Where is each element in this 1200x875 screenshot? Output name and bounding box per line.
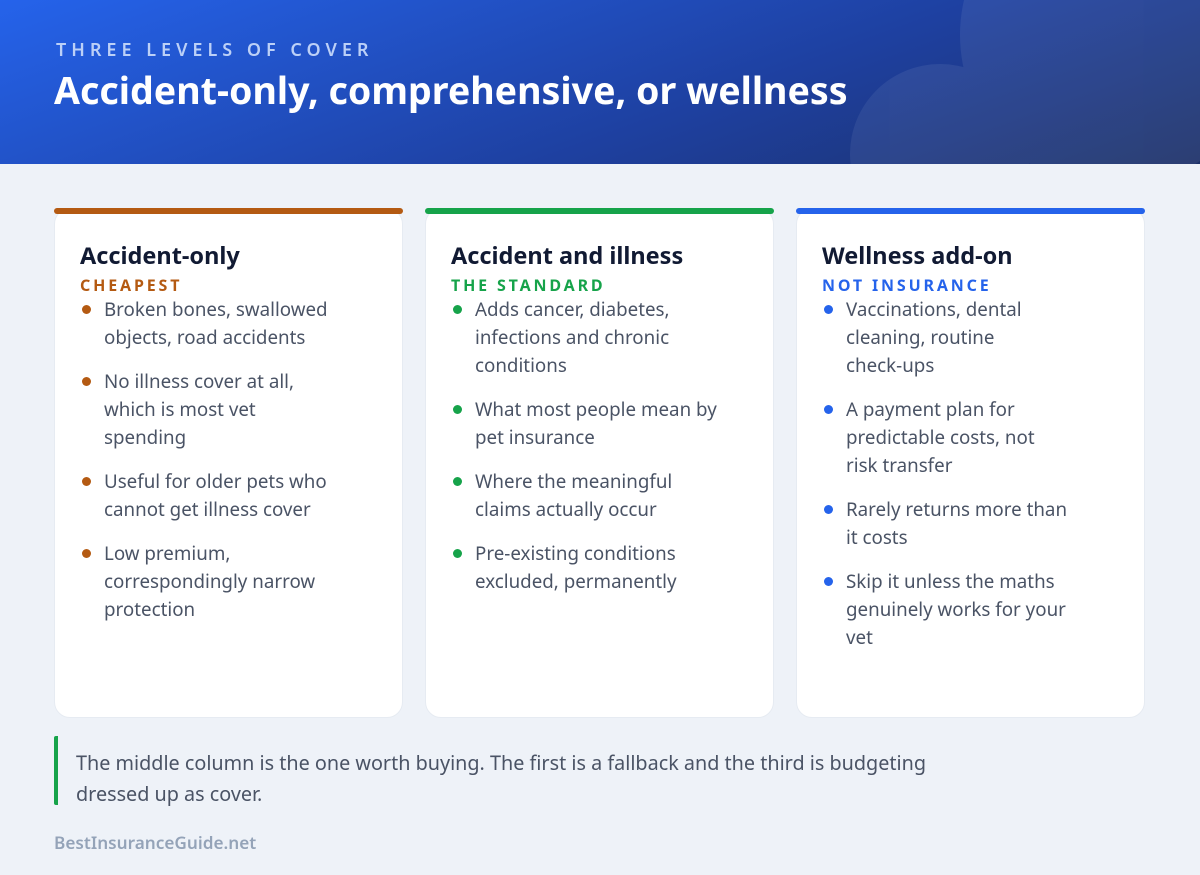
panel: accident-only: correspondingly narrow [104, 569, 315, 594]
panel: accident and illness: What most people mean by [475, 397, 717, 422]
panel: accident-only [54, 208, 403, 718]
panel: wellness add-on: Skip it unless the maths [846, 569, 1055, 594]
accent bar: accident-only [54, 208, 403, 214]
panel: wellness add-on: cleaning, routine [846, 325, 994, 350]
bullet [824, 497, 1067, 550]
panel: wellness add-on: Vaccinations, dental [846, 297, 1022, 322]
accent bar: accident and illness [425, 208, 774, 214]
header banner [0, 0, 1200, 164]
panel: wellness add-on [796, 208, 1145, 718]
bullet [82, 369, 294, 450]
bullet [453, 397, 717, 450]
panel: accident and illness: Pre-existing conditions [475, 541, 676, 566]
tag: THE STANDARD [451, 274, 605, 296]
panel: accident and illness: excluded, permanently [475, 569, 677, 594]
panel: accident and illness: conditions [475, 353, 567, 378]
bullet [824, 397, 1035, 478]
panel: accident-only: protection [104, 597, 195, 622]
panel: accident-only: Broken bones, swallowed [104, 297, 328, 322]
callout text: The middle column is the one worth buying. The first is a fallback and the third is budgeting [76, 749, 926, 776]
panel: wellness add-on: vet [846, 625, 873, 650]
panel: accident-only: Low premium, [104, 541, 230, 566]
bullet [453, 297, 670, 378]
panel: accident and illness: infections and chronic [475, 325, 669, 350]
panel: wellness add-on: predictable costs, not [846, 425, 1035, 450]
footer brand: BestInsuranceGuide.net [54, 832, 256, 855]
heading: Accident-only [80, 239, 240, 271]
callout text: dressed up as cover. [76, 780, 262, 807]
bullet [453, 469, 672, 522]
panel: wellness add-on: Rarely returns more than [846, 497, 1067, 522]
tag: CHEAPEST [80, 274, 182, 296]
heading: Accident and illness [451, 239, 683, 271]
panel: accident and illness: claims actually occur [475, 497, 657, 522]
panel: wellness add-on: genuinely works for your [846, 597, 1066, 622]
tag: NOT INSURANCE [822, 274, 992, 296]
title: Accident-only, comprehensive, or wellness [54, 65, 848, 116]
panel: accident-only: No illness cover at all, [104, 369, 294, 394]
panel: accident and illness: Adds cancer, diabetes, [475, 297, 670, 322]
bullet [824, 569, 1066, 650]
decorative header circles [850, 0, 1200, 164]
callout [54, 736, 954, 805]
panel: accident-only: cannot get illness cover [104, 497, 311, 522]
panel: accident-only: objects, road accidents [104, 325, 305, 350]
panel: accident-only: Useful for older pets who [104, 469, 327, 494]
bullet [82, 541, 315, 622]
panel: accident and illness: pet insurance [475, 425, 595, 450]
panel: wellness add-on: it costs [846, 525, 908, 550]
bullet [82, 297, 328, 350]
panel: wellness add-on: risk transfer [846, 453, 952, 478]
panel: accident and illness [425, 208, 774, 718]
bullet [824, 297, 1022, 378]
panel: accident and illness: Where the meaningful [475, 469, 672, 494]
panel: accident-only: which is most vet [104, 397, 256, 422]
heading: Wellness add-on [822, 239, 1013, 271]
bullet [82, 469, 327, 522]
eyebrow: THREE LEVELS OF COVER [56, 38, 374, 62]
panel: wellness add-on: A payment plan for [846, 397, 1015, 422]
panel: accident-only: spending [104, 425, 186, 450]
callout text [76, 749, 926, 807]
accent bar: wellness add-on [796, 208, 1145, 214]
panel: wellness add-on: check-ups [846, 353, 934, 378]
bullet [453, 541, 677, 594]
